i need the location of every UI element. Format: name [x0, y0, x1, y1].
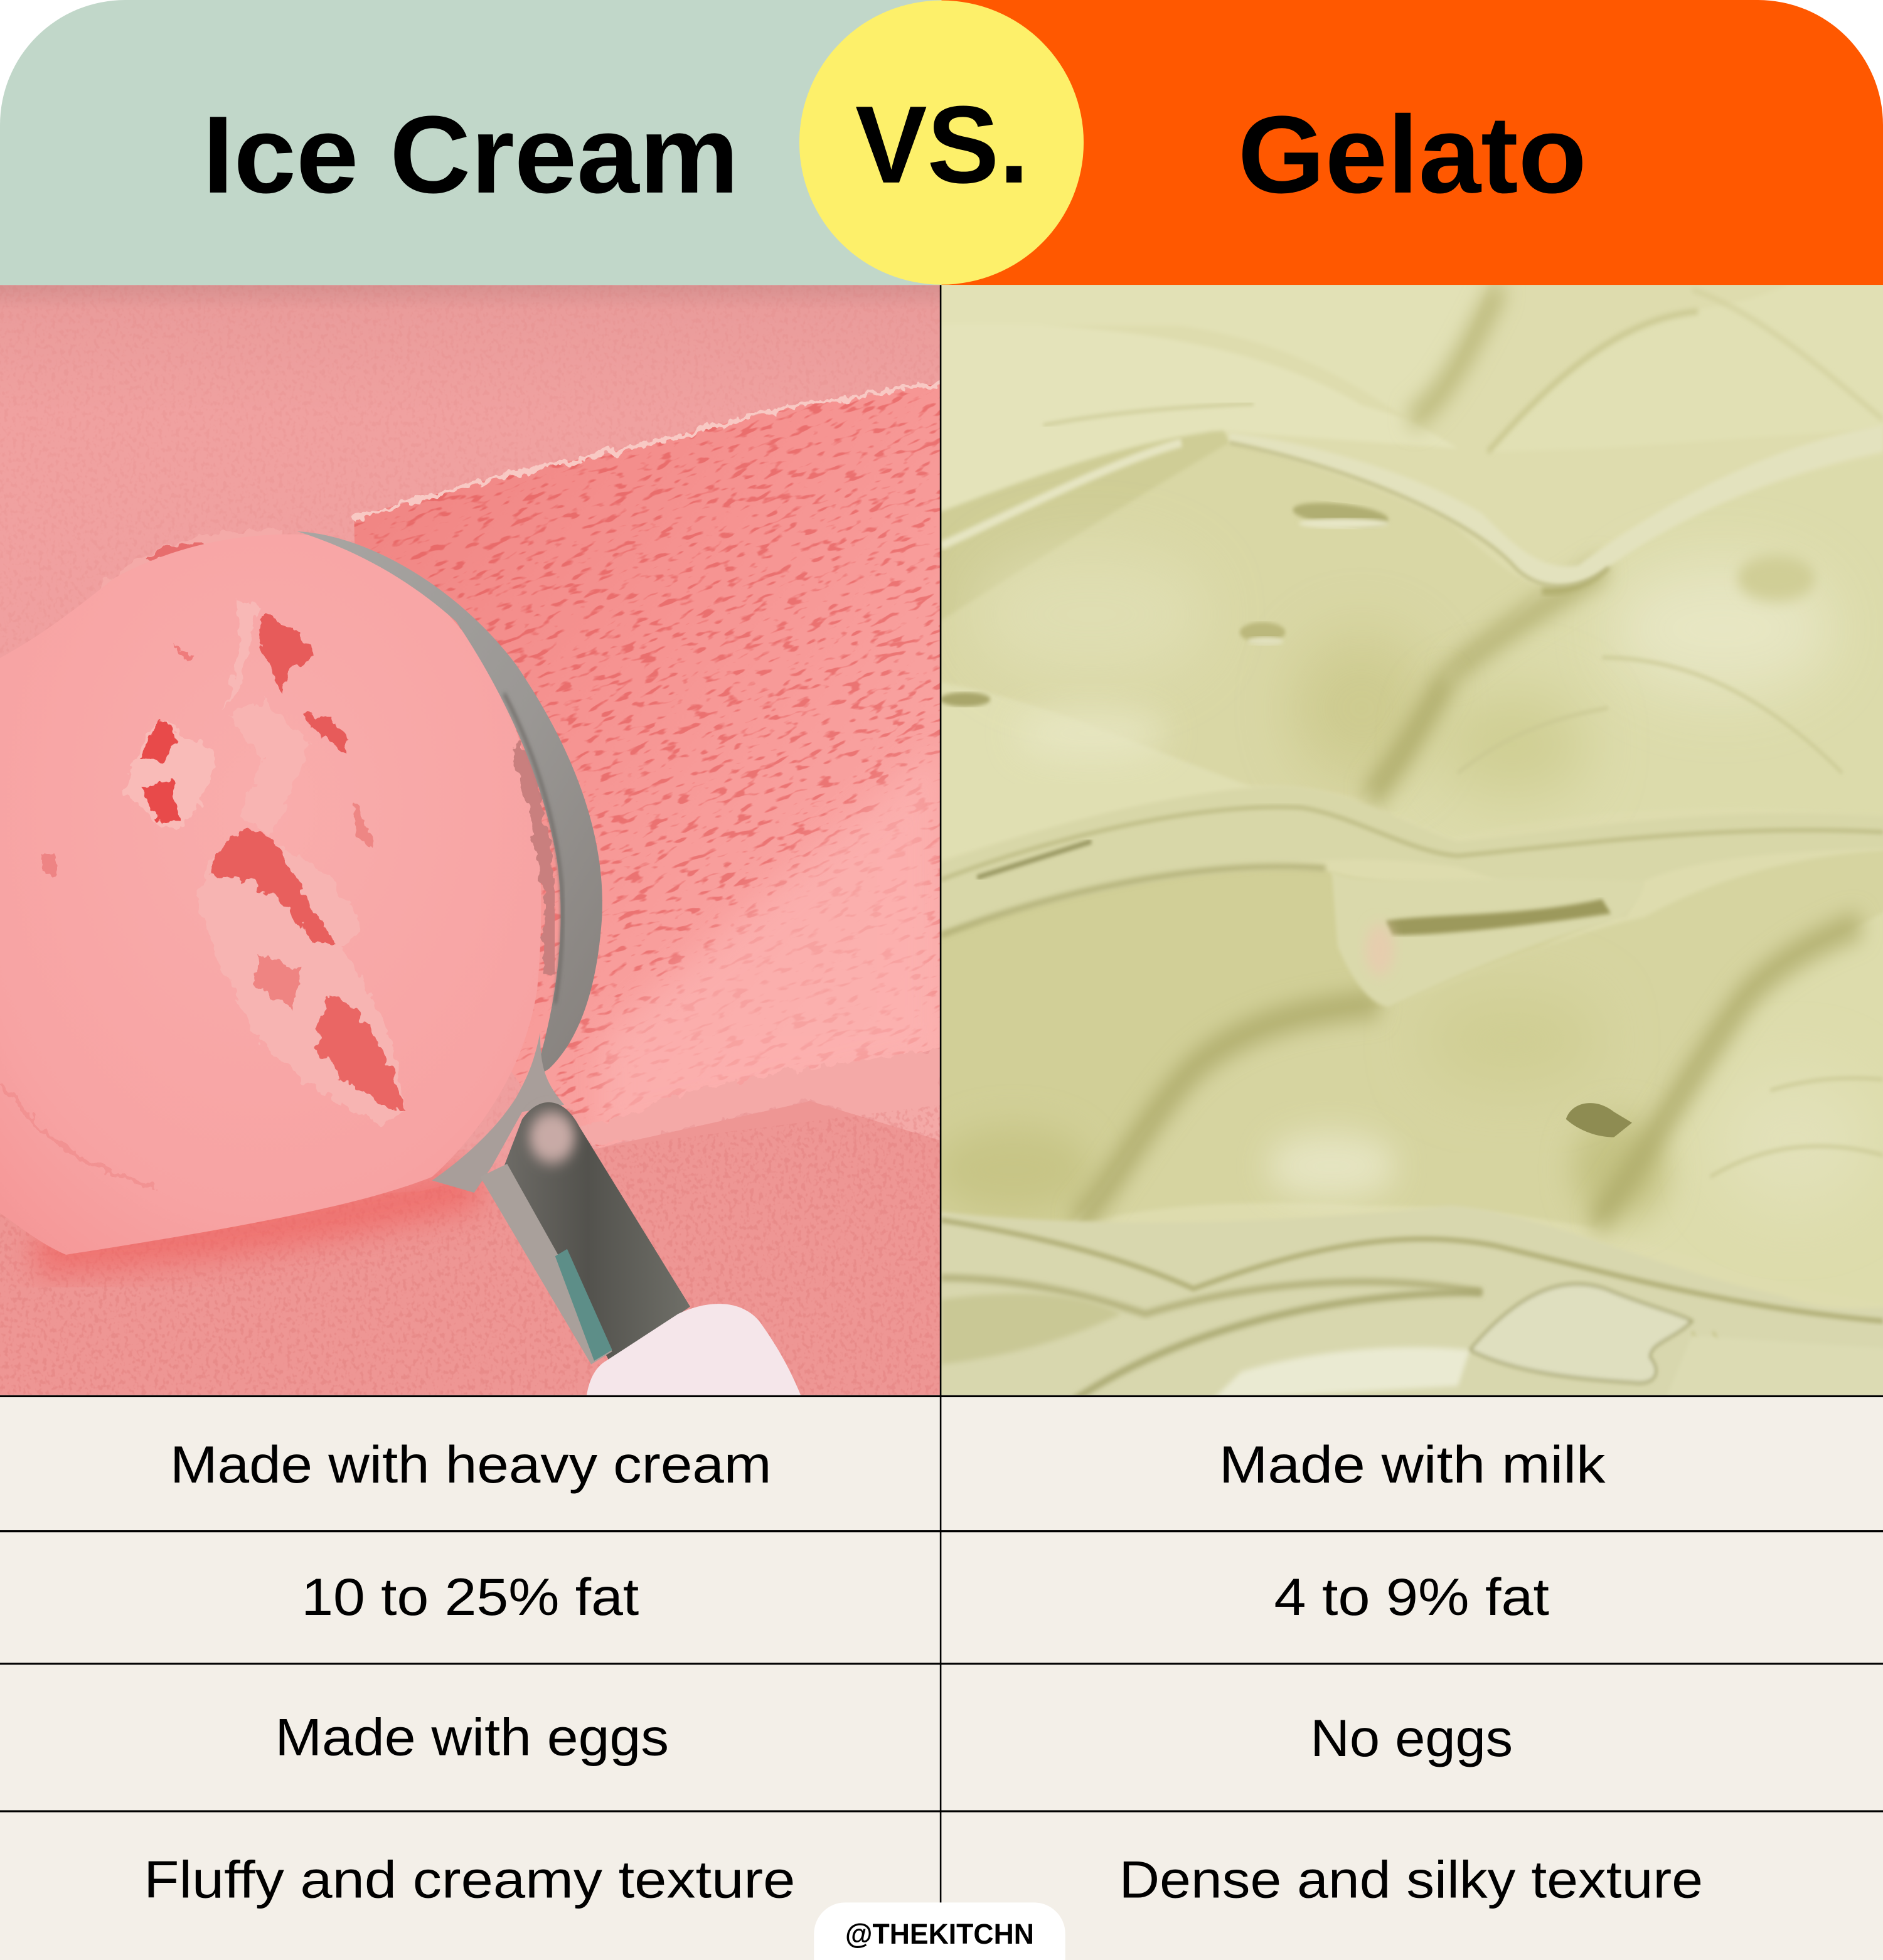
column divider [940, 285, 941, 1906]
heading: Gelato: Gelato [1238, 93, 1587, 216]
panel: gelato header [941, 0, 1883, 285]
ridge band top [1229, 425, 1883, 586]
row 3 left: Made with eggs [275, 1707, 669, 1766]
valley shadows [941, 286, 1883, 1223]
table background [0, 1395, 1883, 1960]
gelato hole [1566, 1103, 1632, 1137]
lower shelf [564, 1047, 941, 1148]
row 1 right: Made with milk [1219, 1435, 1606, 1494]
lobe mid lower [917, 870, 1632, 1223]
lobe right lower [1596, 895, 1883, 1307]
row 2 left: 10 to 25% fat [301, 1567, 639, 1626]
heading: VS.: VS. [855, 83, 1029, 206]
row 3 right: No eggs [1310, 1708, 1513, 1767]
row rules [0, 1396, 1883, 1811]
scoop handle [504, 1102, 690, 1361]
row 2 right: 4 to 9% fat [1274, 1567, 1549, 1626]
crumbly scoop edge [516, 744, 551, 975]
row 1 left: Made with heavy cream [170, 1435, 771, 1494]
tab shape [814, 1902, 1065, 1960]
row 4 left: Fluffy and creamy texture [144, 1850, 795, 1909]
scooped craters [42, 600, 405, 1123]
scoop neck [432, 1033, 564, 1193]
heading: Ice Cream: Ice Cream [203, 93, 739, 216]
scoop grip [585, 1304, 806, 1408]
ice cream ball [0, 535, 541, 1255]
light and shade on lobes [935, 550, 1872, 1220]
photo: ice cream scoop [0, 285, 940, 1395]
handle: @THEKITCHN [845, 1918, 1034, 1950]
middle ridge band [917, 786, 1883, 939]
central fold [1331, 870, 1644, 1008]
scoop shadow [36, 1184, 480, 1252]
lobe center lower [1076, 849, 1883, 1227]
dimples [940, 499, 1815, 706]
credit tab [814, 1902, 1065, 1960]
lobe upper left [917, 441, 1542, 798]
lobe upper right [1371, 452, 1883, 838]
panel: ice cream header [0, 0, 941, 285]
bottom ruffles [917, 1206, 1883, 1437]
ice cream cavity [354, 384, 940, 1148]
header bar [0, 0, 1883, 285]
badge: VS circle [799, 1, 1084, 285]
soft base lobes [917, 253, 1883, 1307]
photo: gelato swirls [917, 253, 1883, 1437]
row 4 right: Dense and silky texture [1119, 1850, 1703, 1909]
scoop metal rim [297, 531, 602, 1072]
